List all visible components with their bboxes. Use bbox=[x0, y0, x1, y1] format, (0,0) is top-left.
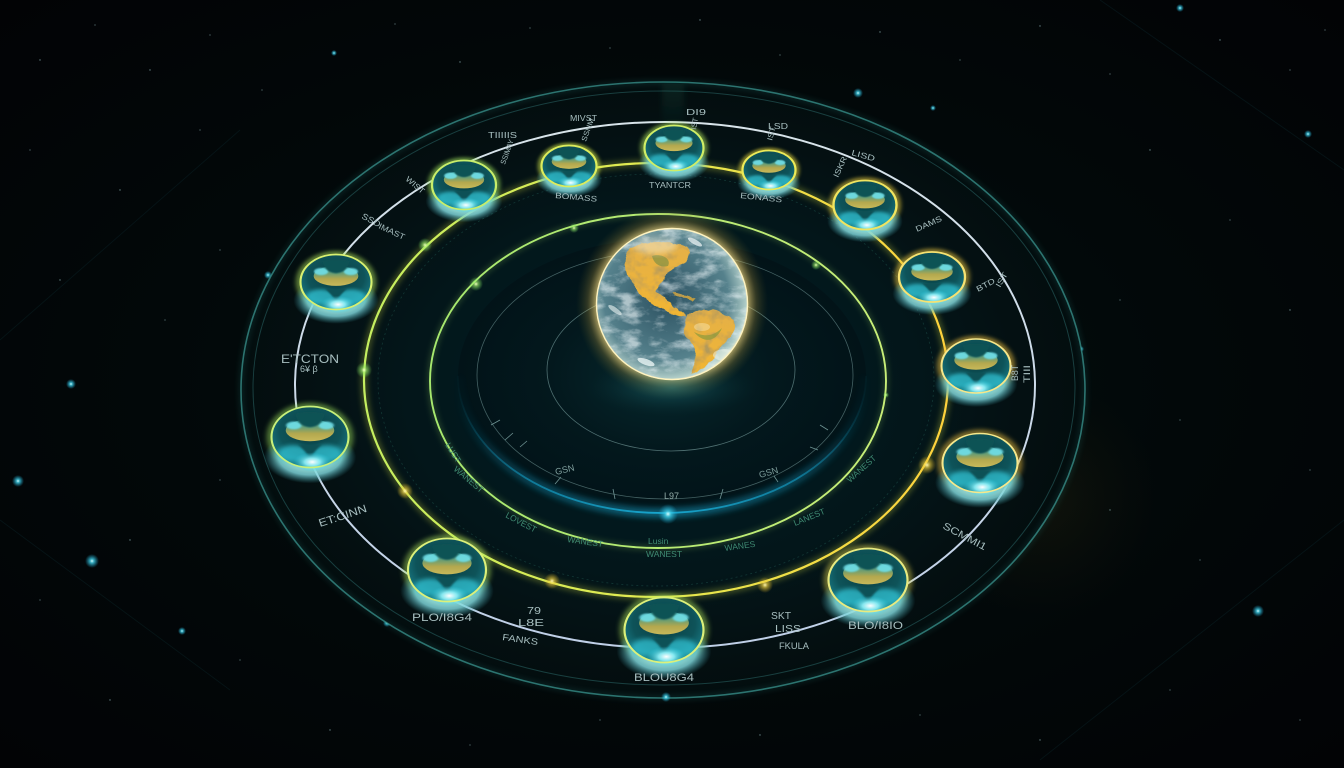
outer node labels: EONASS bbox=[740, 191, 783, 204]
dial labels: L97 bbox=[664, 491, 679, 501]
outer node labels: 79 bbox=[527, 606, 542, 617]
outer node labels: IST bbox=[765, 125, 778, 142]
outer node labels: SKT bbox=[771, 611, 791, 622]
warm haze right bbox=[920, 380, 1160, 620]
green ring labels: WANEST bbox=[845, 453, 878, 484]
green ring labels: WANEST bbox=[567, 534, 604, 549]
outer node labels: IST bbox=[689, 117, 700, 130]
outer node labels: IST bbox=[994, 271, 1010, 289]
node 5 bbox=[827, 180, 903, 242]
outer node labels: 6¥ β bbox=[300, 364, 318, 374]
green ring labels: WANEST bbox=[646, 549, 682, 559]
earth halo bbox=[576, 208, 768, 400]
node 11 bbox=[400, 538, 494, 618]
south america bbox=[684, 310, 735, 374]
outer node labels: LSD bbox=[768, 122, 788, 131]
outer node labels: BLOU8G4 bbox=[634, 672, 694, 684]
green ring labels: WANEST bbox=[452, 464, 486, 495]
ring: thin dial with ticks bbox=[477, 251, 853, 499]
ring: green orbit bbox=[430, 214, 886, 548]
beam: top glow bbox=[662, 84, 684, 134]
outer node labels: L8E bbox=[518, 618, 544, 629]
under-earth glow bbox=[587, 360, 757, 416]
dial labels: GSN bbox=[554, 463, 575, 477]
outer node labels: B8T bbox=[1010, 365, 1020, 381]
outer node labels: BTD bbox=[975, 276, 997, 294]
outer node labels: TIII bbox=[1022, 365, 1032, 383]
green ring labels: LANEST bbox=[792, 506, 826, 528]
icon: earth globe bbox=[596, 228, 748, 380]
outer node labels: MIVST bbox=[570, 114, 597, 123]
outer node labels: DAMS bbox=[914, 214, 943, 234]
green ring labels bbox=[443, 441, 878, 559]
node 3 bbox=[639, 125, 709, 182]
outer node labels: SSNM bbox=[579, 117, 596, 143]
node 2 bbox=[536, 145, 602, 197]
ring: white orbit bbox=[295, 122, 1035, 648]
green ring labels: LUST bbox=[443, 441, 463, 464]
outer node labels: IMAST bbox=[377, 222, 406, 242]
outer node labels bbox=[281, 108, 1032, 684]
outer node labels: WIST bbox=[404, 175, 426, 196]
node 6 bbox=[892, 251, 972, 315]
outer node labels: FANKS bbox=[502, 632, 539, 647]
ring: yellow orbit bbox=[364, 163, 948, 597]
outer node labels: BLO/I8IO bbox=[848, 620, 904, 632]
outer node labels: SCMMI1 bbox=[941, 521, 989, 553]
node 7 bbox=[935, 338, 1017, 407]
north america bbox=[626, 242, 689, 318]
node 8 bbox=[935, 433, 1025, 508]
green ring labels: LOVEST bbox=[504, 510, 538, 535]
dial labels: GSN bbox=[758, 465, 779, 480]
node 13 bbox=[293, 254, 379, 324]
dial labels bbox=[554, 463, 779, 501]
node 12 bbox=[264, 406, 356, 483]
panel: outer disc bbox=[241, 82, 1085, 698]
outer node labels: ISKR bbox=[832, 155, 849, 179]
outer node labels: ET:CINN bbox=[317, 503, 369, 530]
outer node labels: E'TCTON bbox=[281, 352, 339, 366]
node 4 bbox=[737, 150, 801, 200]
outer node labels: TYANTCR bbox=[649, 181, 691, 190]
green ring labels: Lusin bbox=[648, 536, 669, 546]
outer node labels: SSIMAY bbox=[498, 138, 516, 166]
node 9 bbox=[821, 548, 915, 628]
ring flares bbox=[356, 223, 936, 702]
outer node labels: PLO/I8G4 bbox=[412, 612, 472, 624]
outer node labels: FKULA bbox=[779, 641, 809, 651]
node: blue flare bbox=[658, 504, 678, 524]
outer node labels: LISS bbox=[775, 624, 801, 635]
ring: blue glow bbox=[458, 239, 866, 513]
islands bbox=[672, 293, 696, 300]
node 10 bbox=[617, 597, 711, 679]
outer node labels: LISD bbox=[850, 148, 876, 163]
cloud wisps bbox=[638, 358, 654, 366]
green ring labels: WANES bbox=[724, 539, 756, 553]
outer node labels: SSD bbox=[360, 211, 382, 229]
outer node labels: DI9 bbox=[686, 108, 707, 117]
outer node labels: BOMASS bbox=[555, 191, 597, 204]
node 1 bbox=[426, 160, 502, 222]
outer node labels: TIIIIIS bbox=[488, 131, 517, 140]
